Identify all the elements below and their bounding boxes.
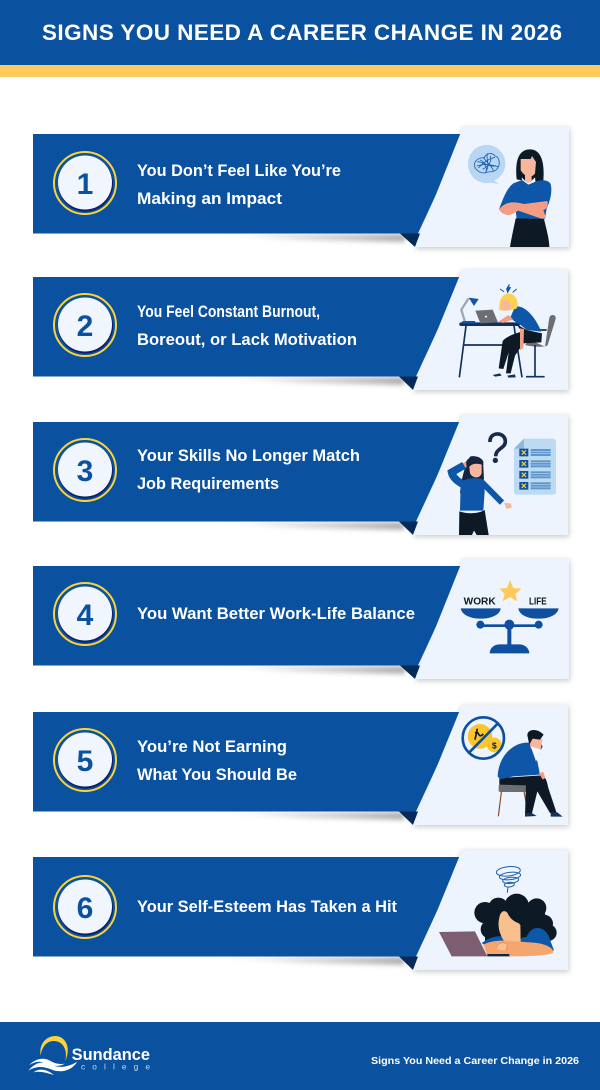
item 6 — [33, 850, 569, 972]
footer caption: Signs You Need a Career Change in 2026 — [371, 1055, 579, 1067]
heading: You Don’t Feel Like You’re — [137, 162, 341, 180]
number badge — [54, 152, 116, 214]
icon: work-life scale — [461, 580, 559, 653]
fold — [399, 522, 418, 535]
number badge: 5 — [77, 745, 93, 778]
banner — [33, 134, 464, 234]
number badge: 3 — [77, 455, 93, 488]
item 5 — [33, 705, 569, 827]
heading: Your Self-Esteem Has Taken a Hit — [137, 898, 398, 916]
item 3 — [33, 415, 569, 537]
heading: Boreout, or Lack Motivation — [137, 331, 357, 349]
icon: defeated woman on laptop — [439, 865, 557, 956]
footer band — [0, 1022, 600, 1090]
illustration panel — [415, 127, 569, 247]
title: SIGNS YOU NEED A CAREER CHANGE IN 2026 — [42, 20, 562, 45]
life label: LIFE — [529, 597, 547, 608]
item 2 — [33, 270, 569, 392]
fold — [400, 234, 420, 247]
heading: You’re Not Earning — [137, 738, 287, 756]
fold — [399, 956, 418, 970]
star — [499, 580, 521, 601]
number badge — [54, 876, 116, 938]
heading: Your Skills No Longer Match — [137, 447, 360, 465]
number badge: 2 — [77, 310, 93, 343]
banner — [33, 566, 464, 666]
banner — [33, 712, 462, 812]
number badge: 1 — [77, 168, 93, 201]
icon: stressed man with no-money sign — [463, 717, 563, 817]
illustration panel — [413, 705, 568, 825]
heading: You Feel Constant Burnout, — [137, 303, 320, 321]
number badge — [54, 439, 116, 501]
item 1 — [33, 127, 570, 249]
illustration panel — [413, 415, 568, 535]
icon: confused woman with checklist — [452, 434, 556, 535]
balance body — [461, 608, 559, 653]
college: college — [81, 1061, 150, 1071]
banner — [33, 422, 462, 522]
number badge — [54, 294, 116, 356]
fold — [399, 812, 418, 825]
waves — [28, 1059, 77, 1075]
wordmark: Sundance — [72, 1046, 150, 1064]
work label: WORK — [464, 597, 496, 608]
heading: Making an Impact — [137, 190, 283, 208]
illustration panel — [415, 559, 569, 679]
illustration panel — [413, 270, 568, 390]
heading: Job Requirements — [137, 475, 279, 493]
illustration panel — [413, 850, 568, 970]
no money sign: $ — [492, 740, 497, 750]
banner — [33, 277, 462, 376]
number badge: 6 — [77, 892, 93, 925]
header band — [0, 0, 600, 77]
icon: exhausted worker at desk — [459, 284, 556, 378]
number badge — [54, 729, 116, 791]
heading: What You Should Be — [137, 766, 297, 784]
sun crescent — [40, 1036, 68, 1061]
number badge — [54, 583, 116, 645]
fold — [399, 376, 418, 390]
banner — [33, 857, 462, 956]
number badge: 4 — [77, 599, 94, 632]
icon: woman with tangled thought — [468, 145, 551, 247]
item 4 — [33, 559, 570, 681]
heading: You Want Better Work-Life Balance — [137, 605, 415, 623]
fold — [400, 666, 420, 679]
logo — [28, 1036, 150, 1075]
